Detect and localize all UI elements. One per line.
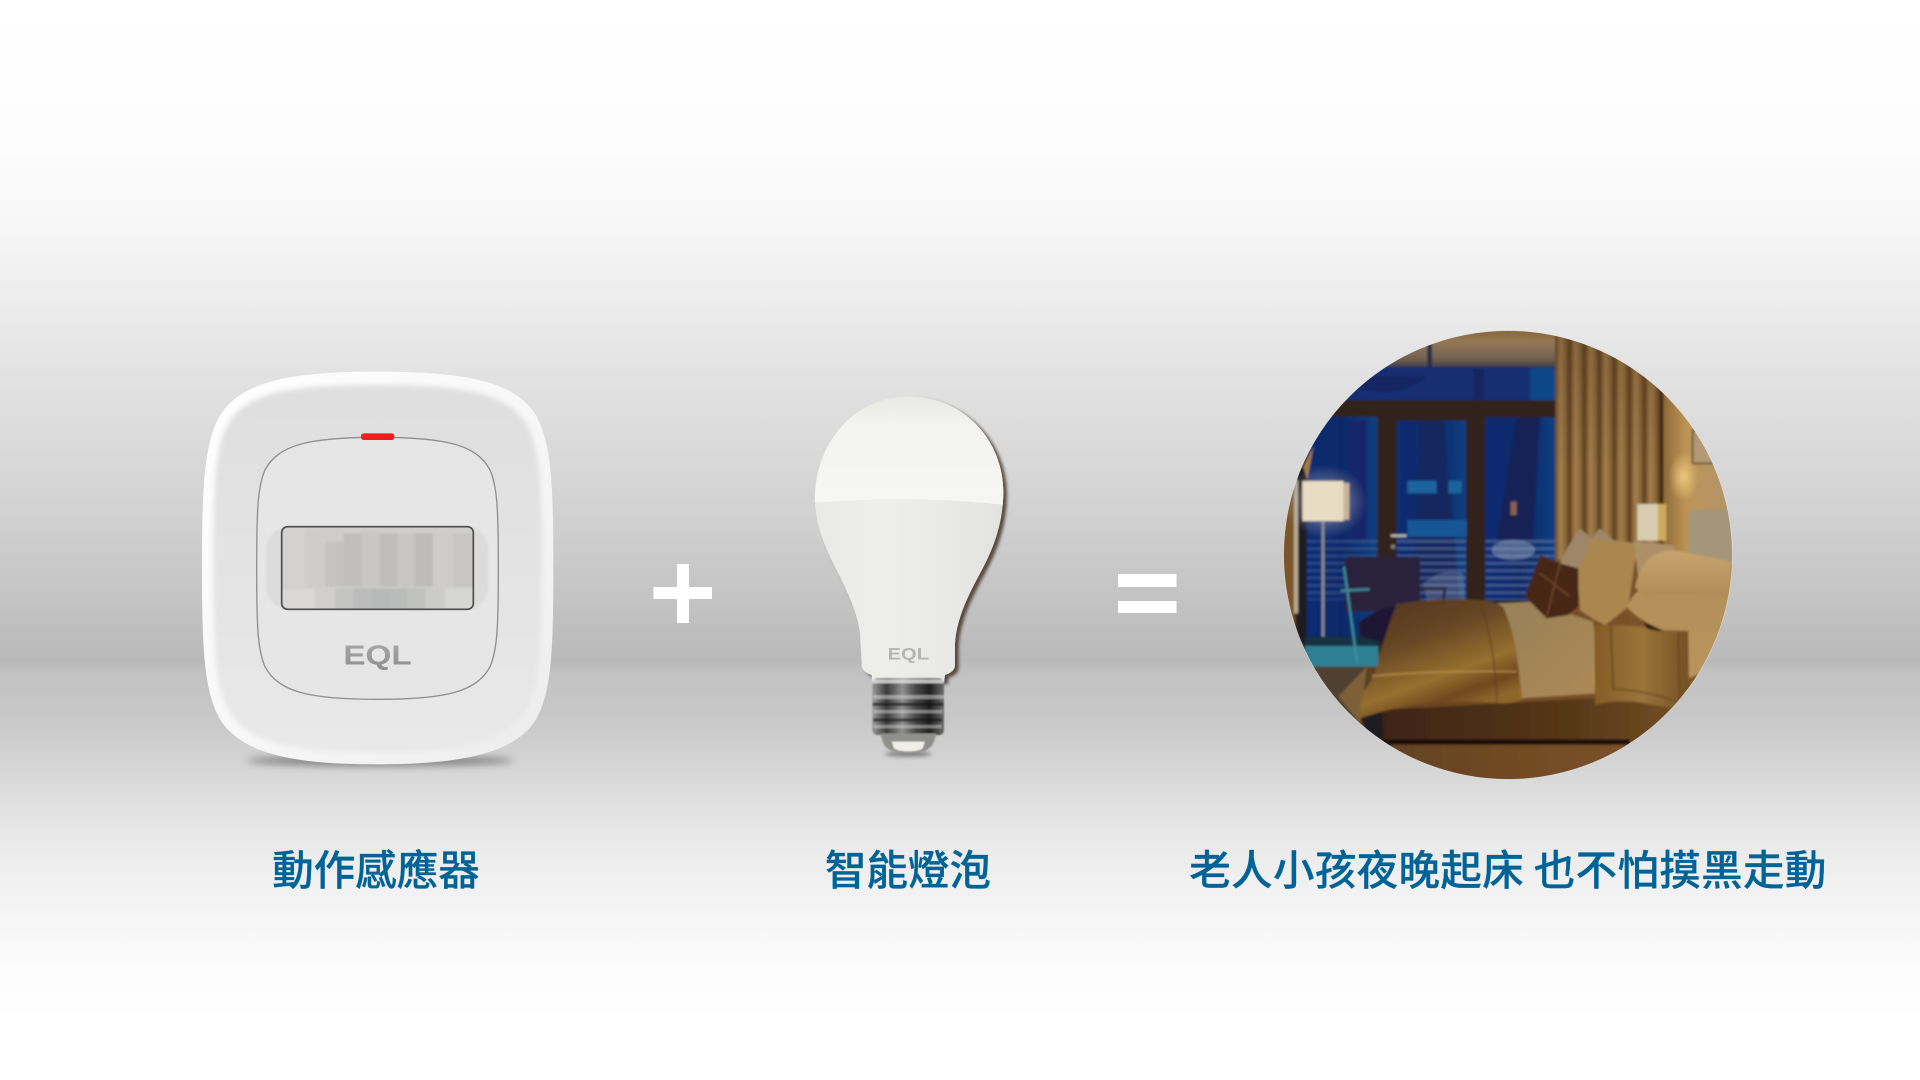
infographic canvas	[0, 219, 1920, 930]
label: smart bulb: 智能燈泡	[825, 837, 991, 897]
icon: motion sensor device	[202, 372, 554, 771]
icon: smart LED bulb: EQL	[888, 645, 929, 664]
icon: equals sign	[1118, 574, 1176, 613]
icon: plus sign	[654, 564, 712, 623]
icon: smart LED bulb	[814, 396, 1010, 760]
label: motion sensor: 動作感應器	[272, 837, 480, 897]
photo: bedroom at night in a circle	[1284, 330, 1732, 780]
icon: motion sensor device: EQL	[343, 639, 412, 670]
label: benefit text: 老人小孩夜晚起床 也不怕摸黑走動	[1189, 837, 1827, 897]
